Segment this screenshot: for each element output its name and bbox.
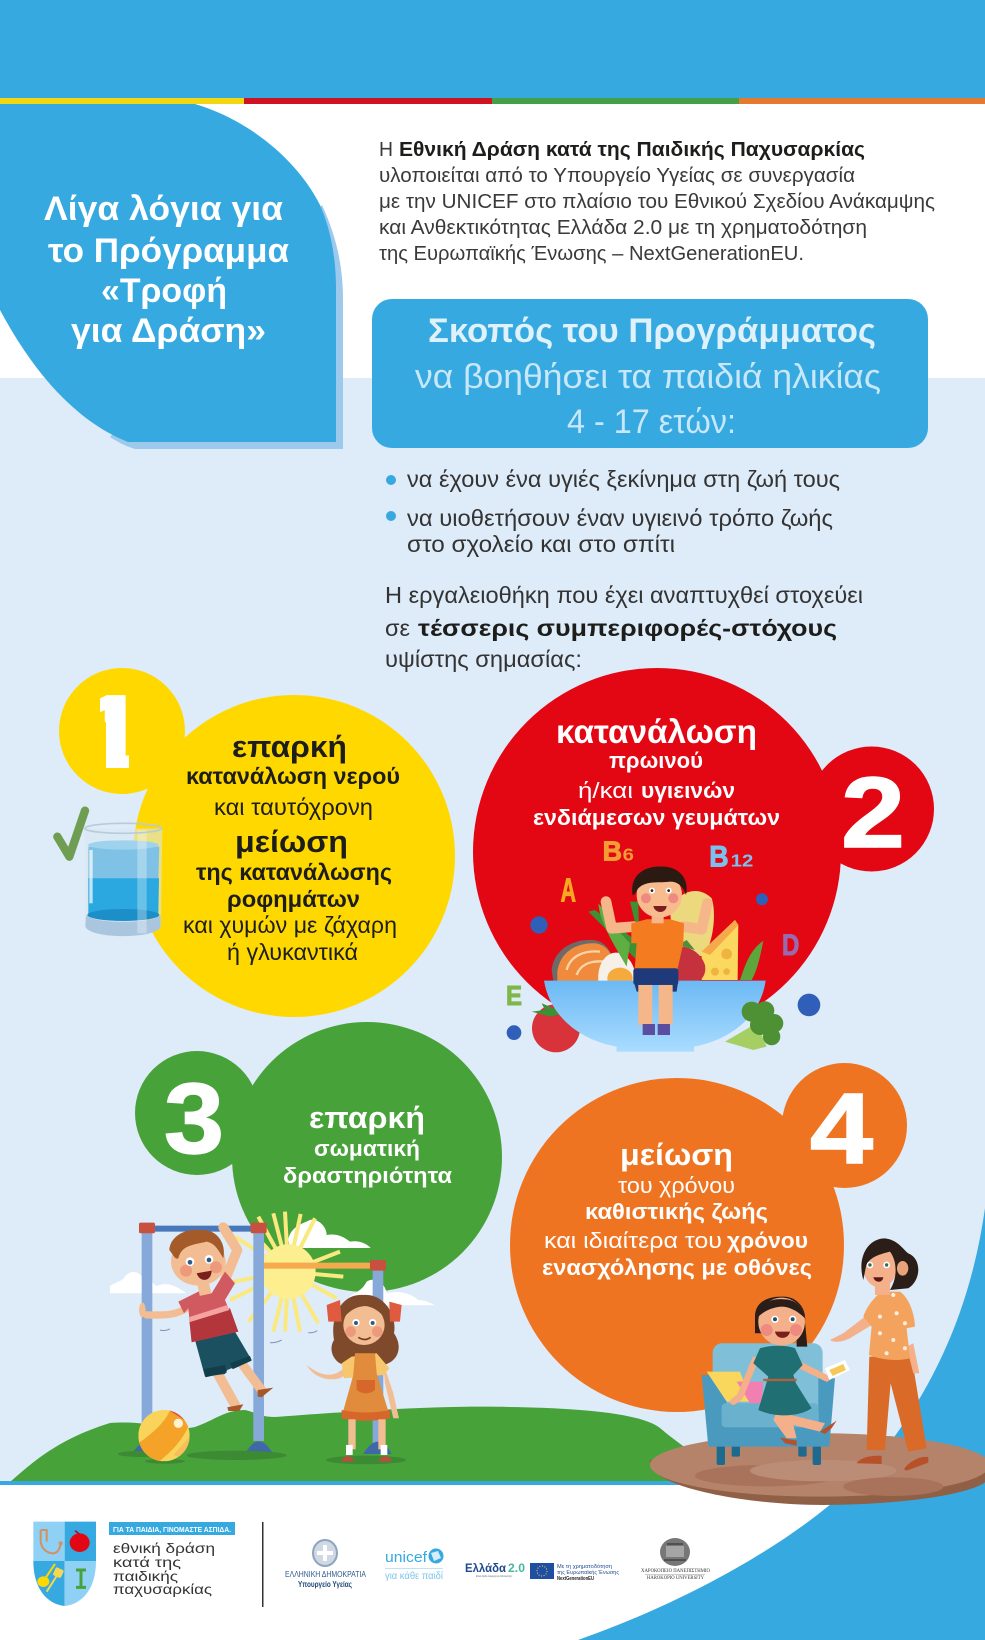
panel: behaviour 1: επαρκή <box>232 729 347 764</box>
panel: programme title <box>0 104 343 449</box>
panel: behaviour 4: 4 <box>810 1073 873 1185</box>
logo: Greece 2.0 <box>465 1561 525 1578</box>
vitamin letters: D <box>782 929 799 962</box>
logo: Greece 2.0: 2.0 <box>508 1561 525 1575</box>
logo: UNICEF <box>385 1548 444 1582</box>
toolkit text <box>385 582 863 672</box>
armchair <box>702 1343 835 1465</box>
panel: behaviour 4 <box>510 1063 907 1412</box>
sun <box>261 1244 316 1299</box>
logo text: national action: παιδικής <box>113 1568 178 1584</box>
logo text: national action <box>109 1522 235 1597</box>
bottom-right blue corner <box>578 1208 985 1640</box>
panel: behaviour 4: χρόνου <box>727 1228 808 1253</box>
logo: Greece 2.0: Εθνικό Σχέδιο Ανάκαμψης και Ανθεκτικότητας <box>476 1574 512 1578</box>
bullet list: στο σχολείο και στο σπίτι <box>407 531 675 557</box>
illustration: children in playground <box>110 1212 435 1464</box>
panel: behaviour 2: πρωινού <box>609 748 703 773</box>
ball <box>138 1410 190 1463</box>
panel: behaviour 2: κατανάλωση <box>556 713 757 750</box>
logo: Hellenic Republic Ministry of Health: Υπουργείο Υγείας <box>298 1580 352 1589</box>
bullet list: να έχουν ένα υγιές ξεκίνημα στη ζωή τους <box>407 466 840 492</box>
panel: programme aim: 4 - 17 ετών: <box>567 403 736 441</box>
birds <box>160 1329 317 1343</box>
panel: behaviour 1: κατανάλωση νερού <box>186 763 400 789</box>
bullet list <box>386 466 840 557</box>
panel: behaviour 4: καθιστικής ζωής <box>585 1199 768 1224</box>
girl <box>307 1295 402 1462</box>
colour stripe <box>0 98 985 104</box>
broccoli <box>725 1001 783 1050</box>
panel: behaviour 1: και χυμών με ζάχαρη <box>183 912 397 938</box>
toolkit text: τέσσερις συμπεριφορές-στόχους <box>418 615 837 641</box>
icon: water glass with check <box>57 811 162 936</box>
food in bowl <box>552 891 763 989</box>
panel: behaviour 2: 2 <box>841 757 905 869</box>
panel: behaviour 1: της κατανάλωσης <box>196 859 392 885</box>
panel: behaviour 3 <box>135 1022 502 1292</box>
ground line <box>0 1481 720 1485</box>
panel: behaviour 3: σωματική <box>314 1136 420 1161</box>
logo text: national action: εθνική δράση <box>113 1540 215 1556</box>
child on chair <box>733 1297 850 1446</box>
illustration: boy on food bowl with vitamins <box>506 836 820 1052</box>
panel: behaviour 3: επαρκή <box>309 1100 425 1135</box>
panel: behaviour 3: δραστηριότητα <box>283 1163 453 1188</box>
panel: behaviour 2: ή/και <box>578 778 633 803</box>
panel: behaviour 3: 3 <box>164 1063 224 1175</box>
title <box>44 190 289 350</box>
vitamin letters <box>506 836 799 1011</box>
logo text: national action: ΓΙΑ ΤΑ ΠΑΙΔΙΑ, ΓΙΝΟΜΑΣΤΕ ΑΣΠΙΔΑ. <box>113 1525 231 1534</box>
logo: Harokopio University <box>641 1538 710 1581</box>
panel: behaviour 1: μείωση <box>235 824 348 859</box>
panel: behaviour 1: 1 <box>75 674 149 789</box>
panel: behaviour 4: του χρόνου <box>618 1173 735 1198</box>
logo text: national action: κατά της <box>113 1554 181 1570</box>
toolkit text: υψίστης σημασίας: <box>385 646 582 672</box>
shadows <box>118 1451 406 1464</box>
rug <box>650 1433 985 1505</box>
mother <box>830 1238 928 1471</box>
logo: UNICEF: unicef <box>385 1549 428 1566</box>
intro paragraph: της Ευρωπαϊκής Ένωσης – NextGenerationEU. <box>379 243 804 265</box>
title: το Πρόγραμμα <box>48 232 289 270</box>
intro paragraph: Η <box>379 139 393 161</box>
logo: Harokopio University: HAROKOPIO UNIVERSITY <box>647 1575 704 1581</box>
logo text: national action: παχυσαρκίας <box>113 1581 212 1597</box>
logo: EU funding: NextGenerationEU <box>557 1576 594 1582</box>
vitamin letters: A <box>561 873 576 910</box>
title: Λίγα λόγια για <box>44 190 283 228</box>
boy <box>606 866 707 1035</box>
title: για Δράση» <box>71 312 266 350</box>
intro paragraph: με την UNICEF στο πλαίσιο του Εθνικού Σχεδίου Ανάκαμψης <box>379 191 935 213</box>
intro paragraph: Εθνική Δράση κατά της Παιδικής Παχυσαρκίας <box>399 139 865 161</box>
logo: EU funding: Με τη χρηματοδότηση <box>557 1563 612 1570</box>
climbing frame <box>132 1223 392 1455</box>
toolkit text: Η εργαλειοθήκη που έχει αναπτυχθεί στοχεύει <box>385 582 863 608</box>
tomato <box>532 1004 580 1052</box>
logo: Hellenic Republic Ministry of Health <box>285 1540 367 1589</box>
toolkit text: σε <box>385 615 410 641</box>
logo: Greece 2.0: Ελλάδα <box>465 1561 507 1575</box>
intro paragraph <box>379 139 935 265</box>
panel: programme aim: Σκοπός του Προγράμματος <box>428 312 876 350</box>
panel: behaviour 4: και ιδιαίτερα του <box>544 1228 722 1253</box>
logo: Hellenic Republic Ministry of Health: ΕΛΛΗΝΙΚΗ ΔΗΜΟΚΡΑΤΙΑ <box>285 1570 367 1579</box>
intro paragraph: και Ανθεκτικότητας Ελλάδα 2.0 με τη χρηματοδότηση <box>379 217 867 239</box>
panel: behaviour 2: υγιεινών <box>641 778 735 803</box>
logo: EU funding: της Ευρωπαϊκής Ένωσης <box>557 1569 620 1576</box>
panel: behaviour 1 <box>59 668 455 1017</box>
panel: behaviour 1: ροφημάτων <box>227 886 360 912</box>
vitamin letters: 6 <box>623 845 634 865</box>
panel: behaviour 1: και ταυτόχρονη <box>214 794 373 820</box>
blueberries <box>507 893 820 1040</box>
panel: programme aim: να βοηθήσει τα παιδιά ηλικίας <box>415 358 881 396</box>
vitamin letters: E <box>506 980 522 1011</box>
logo: EU funding <box>530 1563 620 1582</box>
sun rays <box>230 1212 343 1332</box>
panel: behaviour 1: ή γλυκαντικά <box>227 939 358 965</box>
vitamin letters: B <box>709 841 729 874</box>
panel: behaviour 2: ενδιάμεσων γευμάτων <box>533 805 780 830</box>
panel: behaviour 4: ενασχόλησης με οθόνες <box>542 1255 812 1280</box>
logo: Harokopio University: ΧΑΡΟΚΟΠΕΙΟ ΠΑΝΕΠΙΣΤΗΜΙΟ <box>641 1568 710 1574</box>
bullet list: να υιοθετήσουν έναν υγιεινό τρόπο ζωής <box>407 505 833 531</box>
clouds <box>110 1220 435 1305</box>
panel: behaviour 4: μείωση <box>620 1137 733 1172</box>
panel: programme aim <box>372 299 928 448</box>
vitamin letters: B <box>603 836 622 867</box>
title: «Τροφή <box>101 272 227 310</box>
ground hill <box>10 1407 720 1482</box>
illustration: mother and child with phone <box>650 1238 985 1505</box>
top blue band <box>0 0 985 98</box>
footer divider <box>262 1522 264 1607</box>
logo: national action shield <box>33 1522 96 1606</box>
bowl <box>544 981 766 1052</box>
logo: UNICEF: για κάθε παιδί <box>385 1570 444 1582</box>
vitamin letters: 12 <box>731 851 753 871</box>
boy on bars <box>139 1227 273 1411</box>
intro paragraph: υλοποιείται από το Υπουργείο Υγείας σε συνεργασία <box>379 165 855 187</box>
panel: behaviour 2 <box>473 668 934 1036</box>
